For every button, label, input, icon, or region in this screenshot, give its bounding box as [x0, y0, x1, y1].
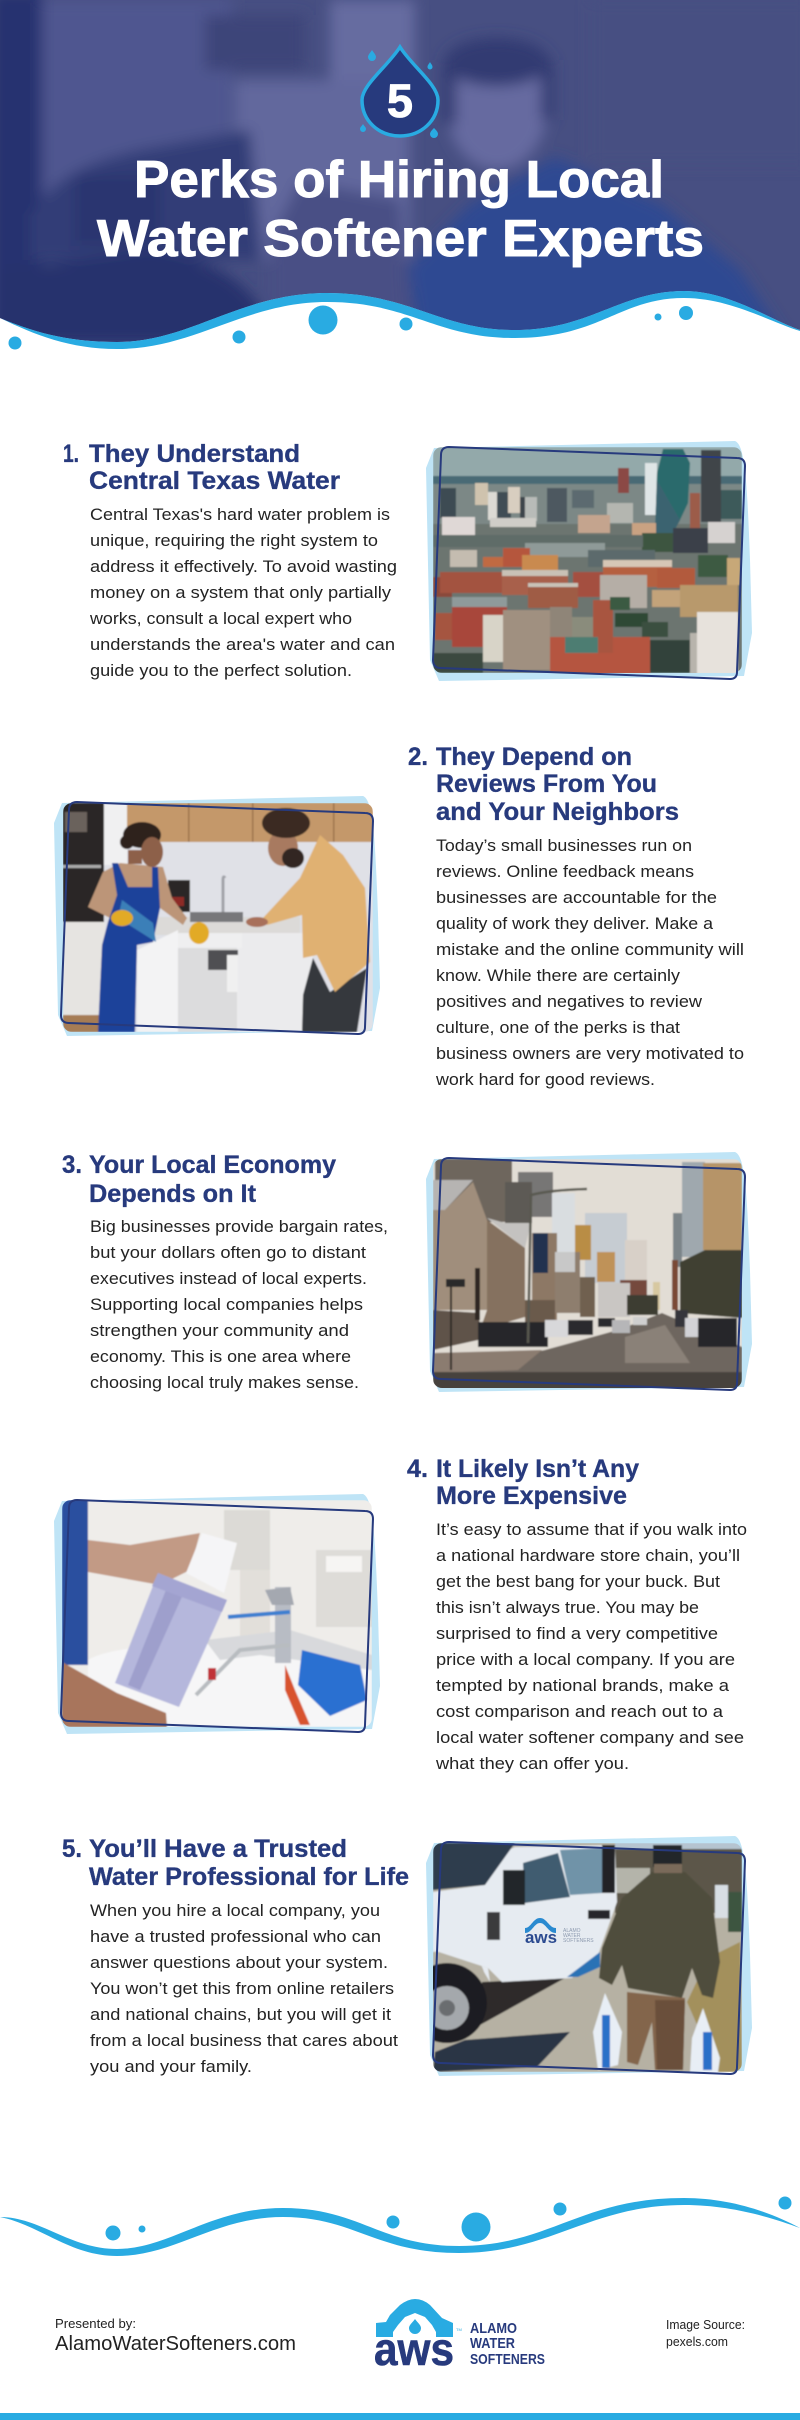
title [97, 151, 704, 268]
text block: perk 5: When you hire a local company, you [90, 1901, 380, 1920]
photo: plumber and homeowner at sink [54, 796, 380, 1036]
text block: perk 3: but your dollars often go to distant [90, 1243, 366, 1262]
heading: perk 1: They Understand [89, 440, 300, 468]
text block: perk 5: and national chains, but you will get it [90, 2005, 391, 2024]
text block: perk 1 [89, 505, 397, 680]
text block: perk 3: Supporting local companies helps [90, 1295, 363, 1314]
heading: perk 5: 5. [62, 1835, 82, 1863]
panel: perk 3 [62, 1151, 752, 1392]
footer logo: Alamo Water Softeners: TM [456, 2327, 462, 2332]
text block: perk 2: know. While there are certainly [436, 966, 681, 985]
text block: perk 2: businesses are accountable for the [436, 888, 717, 907]
text block: perk 4: get the best bang for your buck. But [436, 1572, 720, 1591]
truck door logo: ALAMO [563, 1928, 581, 1934]
footer: presented by [55, 2316, 296, 2355]
photo: water filter installation [54, 1494, 380, 1734]
photo: downtown street [426, 1152, 752, 1392]
text block: perk 4: tempted by national brands, make a [436, 1676, 730, 1695]
bottom bar [0, 2413, 800, 2420]
text block: perk 2 [435, 836, 744, 1089]
footer logo: Alamo Water Softeners [374, 2299, 545, 2375]
photo: technician carrying salt bags by truck [407, 1836, 752, 2076]
text block: perk 4: a national hardware store chain, you’ll [436, 1546, 740, 1565]
text block: perk 1: Central Texas's hard water problem is [90, 505, 390, 524]
footer: presented by: AlamoWaterSofteners.com [55, 2333, 296, 2355]
panel: perk 4 [54, 1455, 747, 1773]
text block: perk 1: unique, requiring the right system to [90, 531, 378, 550]
panel: perk 1 [63, 440, 752, 681]
heading: perk 3: Your Local Economy [89, 1151, 336, 1179]
text block: perk 2: reviews. Online feedback means [436, 862, 694, 881]
text block: perk 5: you and your family. [90, 2057, 252, 2076]
heading: perk 2: and Your Neighbors [436, 798, 679, 826]
heading: perk 1: Central Texas Water [89, 467, 340, 495]
text block: perk 1: address it effectively. To avoid wasting [90, 557, 397, 576]
heading: perk 3 [62, 1151, 336, 1208]
truck door logo [525, 1918, 594, 1943]
text block: perk 2: positives and negatives to review [436, 992, 703, 1011]
text block: perk 2: culture, one of the perks is that [436, 1018, 680, 1037]
text block: perk 2: Today’s small businesses run on [436, 836, 692, 855]
text block: perk 3: executives instead of local experts. [90, 1269, 367, 1288]
heading: perk 4: More Expensive [436, 1482, 627, 1510]
text block: perk 1: works, consult a local expert who [89, 609, 352, 628]
text block: perk 4: what they can offer you. [435, 1754, 629, 1773]
footer: image source: Image Source: [666, 2317, 745, 2332]
text block: perk 3 [90, 1217, 388, 1392]
text block: perk 4: It’s easy to assume that if you walk into [436, 1520, 747, 1539]
heading: perk 2 [408, 743, 679, 826]
footer: image source [666, 2317, 745, 2349]
truck door logo: SOFTENERS [563, 1938, 594, 1944]
footer logo: Alamo Water Softeners: SOFTENERS [470, 2351, 545, 2368]
truck door logo: aws [525, 1928, 557, 1947]
heading: perk 5: You’ll Have a Trusted [89, 1835, 347, 1863]
footer wave with droplets [0, 2196, 800, 2256]
text block: perk 5: have a trusted professional who can [90, 1927, 381, 1946]
header background photo: technician with water softener [0, 0, 800, 350]
text block: perk 3: strengthen your community and [90, 1321, 349, 1340]
heading: perk 4: 4. [407, 1455, 428, 1483]
photo: city skyline [426, 441, 752, 681]
text block: perk 5: You won’t get this from online retailers [90, 1979, 394, 1998]
icon: water drop with number 5 [360, 47, 438, 138]
heading: perk 4: It Likely Isn’t Any [436, 1455, 639, 1483]
text block: perk 4: this isn’t always true. You may be [436, 1598, 699, 1617]
heading: perk 4 [407, 1455, 639, 1510]
text block: perk 4: local water softener company and see [436, 1728, 744, 1747]
heading: perk 3: Depends on It [89, 1180, 257, 1208]
heading: perk 1 [63, 440, 340, 495]
heading: perk 2: 2. [408, 743, 428, 771]
heading: perk 1: 1. [63, 440, 79, 468]
text block: perk 3: choosing local truly makes sense. [90, 1373, 359, 1392]
heading: perk 5 [62, 1835, 409, 1891]
text block: perk 2: quality of work they deliver. Make a [436, 914, 714, 933]
footer logo: Alamo Water Softeners: WATER [470, 2335, 515, 2352]
title: Water Softener Experts [97, 210, 704, 268]
footer logo: Alamo Water Softeners: ALAMO [470, 2320, 517, 2337]
text block: perk 2: work hard for good reviews. [435, 1070, 655, 1089]
text block: perk 2: mistake and the online community will [436, 940, 744, 959]
title: Perks of Hiring Local [134, 151, 664, 209]
truck door logo: WATER [563, 1933, 581, 1939]
text block: perk 3: Big businesses provide bargain rates, [90, 1217, 388, 1236]
text block: perk 4 [435, 1520, 747, 1773]
text block: perk 4: price with a local company. If you are [436, 1650, 735, 1669]
text block: perk 4: cost comparison and reach out to a [436, 1702, 724, 1721]
footer: image source: pexels.com [666, 2334, 728, 2349]
icon: water drop with number 5: 5 [387, 74, 413, 127]
heading: perk 5: Water Professional for Life [89, 1863, 409, 1891]
header banner [0, 0, 800, 350]
heading: perk 2: Reviews From You [436, 770, 657, 798]
header wave with droplets [0, 291, 800, 350]
heading: perk 3: 3. [62, 1151, 82, 1179]
text block: perk 2: business owners are very motivated to [436, 1044, 744, 1063]
footer: presented by: Presented by: [55, 2316, 136, 2331]
text block: perk 1: money on a system that only partially [90, 583, 392, 602]
text block: perk 5 [90, 1901, 398, 2076]
text block: perk 5: answer questions about your system. [90, 1953, 388, 1972]
text block: perk 1: understands the area's water and can [90, 635, 395, 654]
text block: perk 1: guide you to the perfect solution. [90, 661, 352, 680]
footer logo: Alamo Water Softeners: aws [374, 2323, 454, 2375]
text block: perk 5: from a local business that cares about [90, 2031, 398, 2050]
text block: perk 3: economy. This is one area where [90, 1347, 351, 1366]
panel: perk 2 [54, 743, 744, 1089]
heading: perk 2: They Depend on [436, 743, 632, 771]
panel: perk 5 [62, 1835, 752, 2076]
text block: perk 4: surprised to find a very competitive [436, 1624, 718, 1643]
